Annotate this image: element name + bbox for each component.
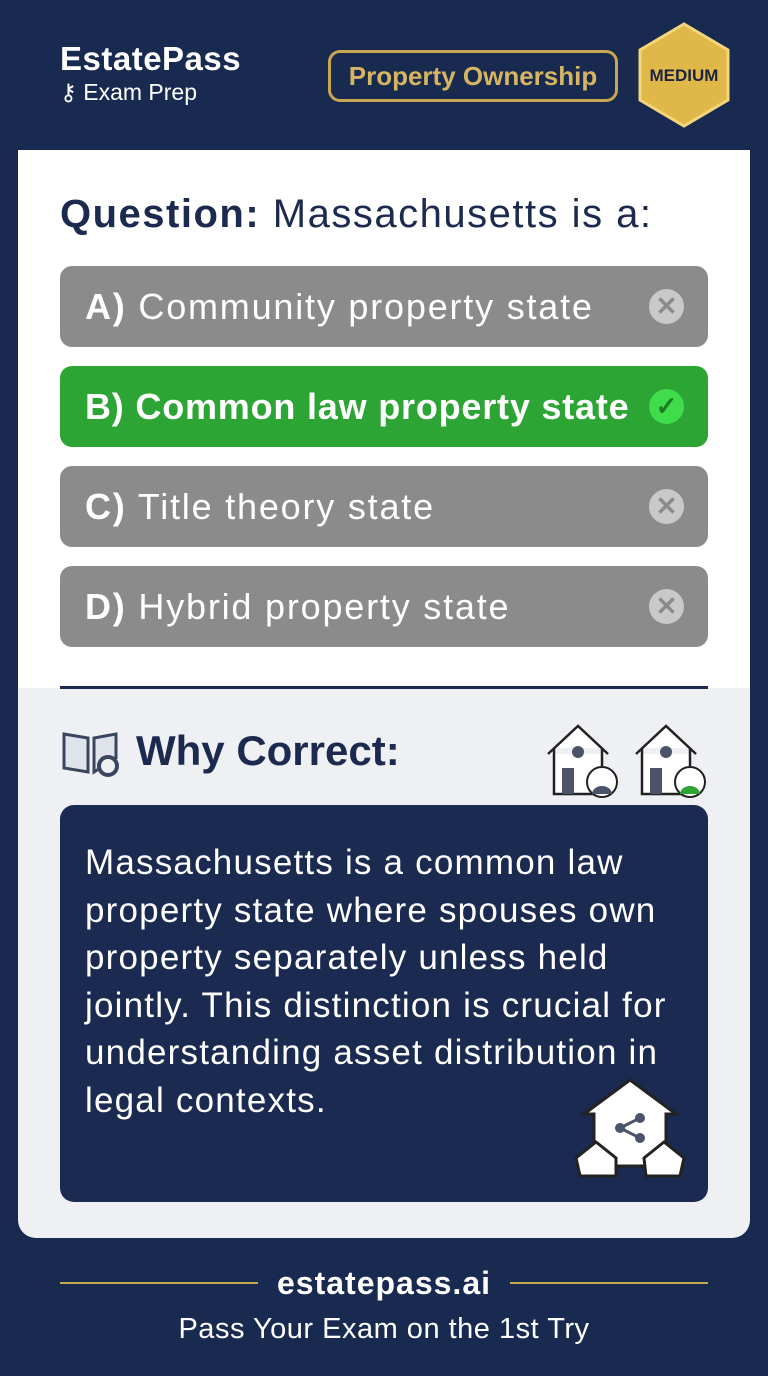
option C: ✕ <box>656 491 677 521</box>
explanation box: Massachusetts is a common law property state where spouses own property separately unless held jointly. This distinction is crucial for understanding asset distribution in legal contexts. <box>85 843 667 1120</box>
footer <box>60 1265 708 1345</box>
explanation box <box>60 805 708 1202</box>
header logo: ⚷ Exam Prep <box>60 79 197 105</box>
header logo <box>60 40 241 105</box>
option D: ✕ <box>656 591 677 621</box>
question heading: Question: Massachusetts is a: <box>60 192 653 236</box>
option B correct <box>60 366 708 447</box>
option D: D) Hybrid property state <box>85 586 510 627</box>
difficulty badge: MEDIUM <box>650 66 718 85</box>
option C <box>60 466 708 547</box>
option D <box>60 566 708 647</box>
category pill <box>328 50 618 102</box>
header logo: EstatePass <box>60 40 241 77</box>
footer: estatepass.ai <box>277 1265 491 1301</box>
icon: shared house <box>574 1078 686 1178</box>
icons: houses <box>547 724 706 798</box>
option A <box>60 266 708 347</box>
footer: Pass Your Exam on the 1st Try <box>178 1313 590 1345</box>
icon: book gear <box>62 732 119 777</box>
option B correct: ✓ <box>656 391 677 421</box>
option B correct: B) Common law property state <box>85 386 629 427</box>
difficulty badge <box>638 22 730 128</box>
option A: A) Community property state <box>85 286 594 327</box>
main card <box>18 150 750 1238</box>
option A: ✕ <box>656 291 677 321</box>
option C: C) Title theory state <box>85 486 435 527</box>
category pill: Property Ownership <box>349 61 597 91</box>
why correct heading: Why Correct: <box>136 727 400 774</box>
